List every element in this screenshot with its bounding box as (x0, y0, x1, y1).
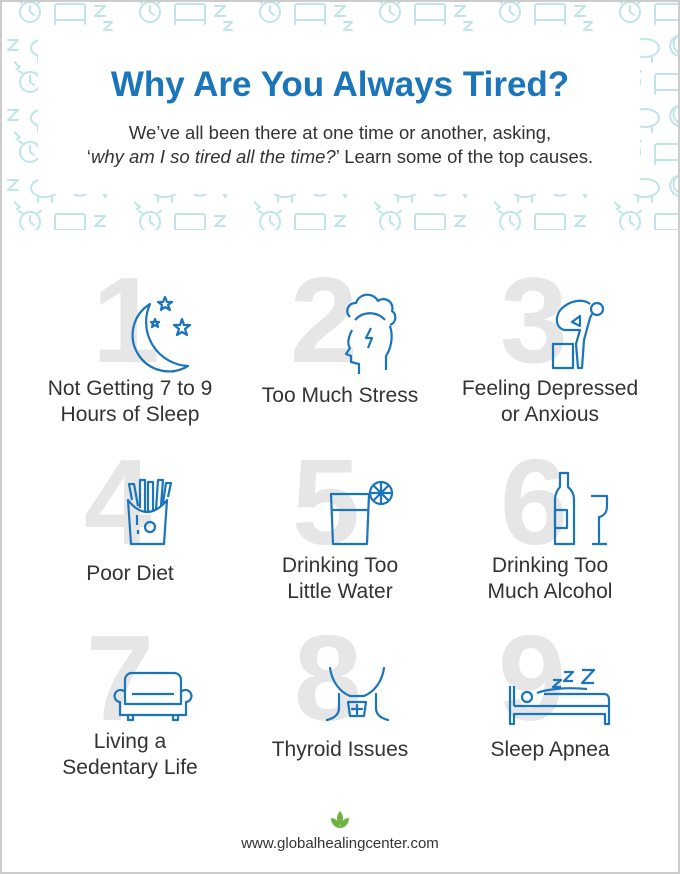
item 9: 9 (498, 610, 566, 746)
item 8: Thyroid Issues (272, 738, 408, 761)
item 4 (84, 434, 174, 585)
icon: stressed head (346, 295, 395, 374)
footer url: www.globalhealingcenter.com (240, 835, 439, 852)
item 7 (62, 610, 198, 779)
item 5: Drinking Too (282, 554, 398, 577)
item 2 (262, 252, 418, 407)
icon: thyroid neck (327, 668, 388, 720)
header pattern band (2, 2, 678, 230)
item 4: 4 (84, 434, 152, 570)
item 3: Feeling Depressed (462, 377, 638, 400)
icon: moon and stars (133, 297, 190, 371)
item 1: Not Getting 7 to 9 (48, 377, 212, 400)
icon: bed with zzz (510, 670, 609, 724)
item 7: Sedentary Life (62, 756, 198, 779)
item 9: Sleep Apnea (490, 738, 610, 761)
item 4: Poor Diet (86, 562, 174, 585)
item 7: 7 (86, 610, 154, 746)
item 8 (272, 610, 408, 761)
item 9 (490, 610, 610, 761)
title: Why Are You Always Tired? (111, 65, 569, 104)
header box (38, 32, 640, 194)
subtitle line 2: ‘why am I so tired all the time?’ Learn some of the top causes. (87, 146, 593, 167)
icon: depressed person (553, 301, 603, 368)
item 6 (488, 434, 612, 603)
item 1: Hours of Sleep (61, 403, 199, 426)
item 7: Living a (94, 730, 167, 753)
footer logo (331, 811, 349, 828)
icon: fries (128, 480, 171, 544)
item 6: Much Alcohol (488, 580, 612, 603)
item 5 (282, 434, 398, 603)
item 8: 8 (294, 610, 362, 746)
item 5: Little Water (287, 580, 393, 603)
item 3: 3 (500, 252, 568, 388)
item 2: 2 (290, 252, 358, 388)
icon: glass of water with lemon (331, 482, 392, 544)
item 3 (462, 252, 638, 426)
item 2: Too Much Stress (262, 384, 418, 407)
item 6: 6 (500, 434, 568, 570)
icon: wine bottle and glass (555, 473, 607, 544)
item 1 (48, 252, 212, 426)
item 6: Drinking Too (492, 554, 608, 577)
subtitle: We’ve all been there at one time or another, asking, (129, 122, 551, 143)
item 3: or Anxious (501, 403, 599, 426)
item 5: 5 (292, 434, 360, 570)
item 1: 1 (92, 252, 160, 388)
icon: couch (115, 673, 191, 720)
